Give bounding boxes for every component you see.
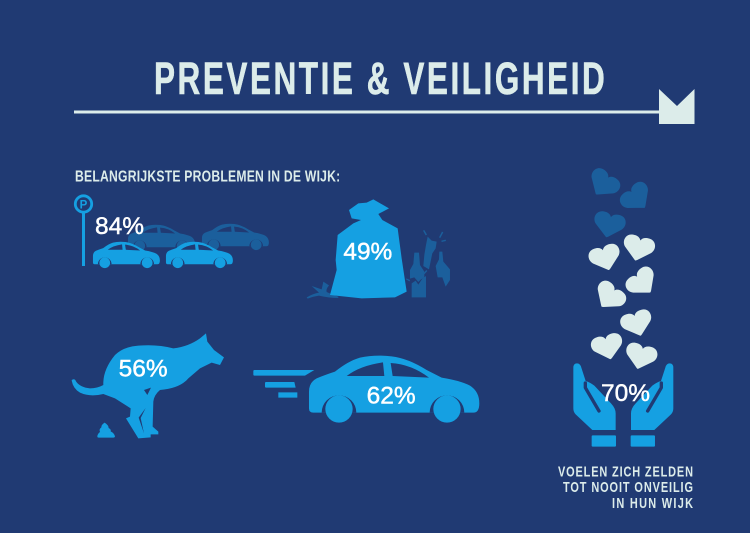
icon: broken bottles [406, 230, 450, 297]
heading: belangrijkste problemen: BELANGRIJKSTE PROBLEMEN IN DE WIJK: [75, 168, 340, 186]
icon: garbage bag [330, 199, 407, 298]
icon: dog poop [97, 423, 115, 438]
percentage 70: 70% [601, 380, 650, 407]
icon: banana peel [307, 282, 338, 299]
panel: parking problem [75, 196, 269, 268]
title arrow rule [74, 89, 694, 124]
panel: dog fouling problem [72, 333, 224, 438]
caption: voelen zich zelden tot nooit onveilig: VOELEN ZICH ZELDEN [558, 463, 693, 480]
percentage 62: 62% [367, 383, 416, 410]
icon: speed lines [253, 370, 314, 398]
percentage 49: 49% [343, 238, 392, 265]
icon: speeding car [309, 356, 479, 423]
panel: speeding problem [253, 356, 479, 423]
icon: open hands [573, 363, 673, 447]
panel: litter problem [307, 199, 450, 299]
title: PREVENTIE & VEILIGHEID [154, 55, 605, 104]
icon: parked bright cars [93, 242, 233, 268]
caption: voelen zich zelden tot nooit onveilig: IN HUN WIJK [612, 494, 694, 511]
icon: dog silhouette [72, 333, 224, 438]
icon: falling dark hearts [583, 165, 657, 241]
caption: voelen zich zelden tot nooit onveilig: TOT NOOIT ONVEILIG [563, 478, 693, 495]
panel: safety [558, 165, 694, 511]
icon: falling light hearts [587, 233, 663, 373]
icon: parking sign: P [80, 199, 88, 211]
caption: voelen zich zelden tot nooit onveilig [558, 463, 694, 511]
percentage 84: 84% [95, 213, 144, 240]
percentage 56: 56% [119, 356, 168, 383]
icon: parked dark cars [128, 224, 269, 251]
icon: parking sign [75, 196, 92, 266]
